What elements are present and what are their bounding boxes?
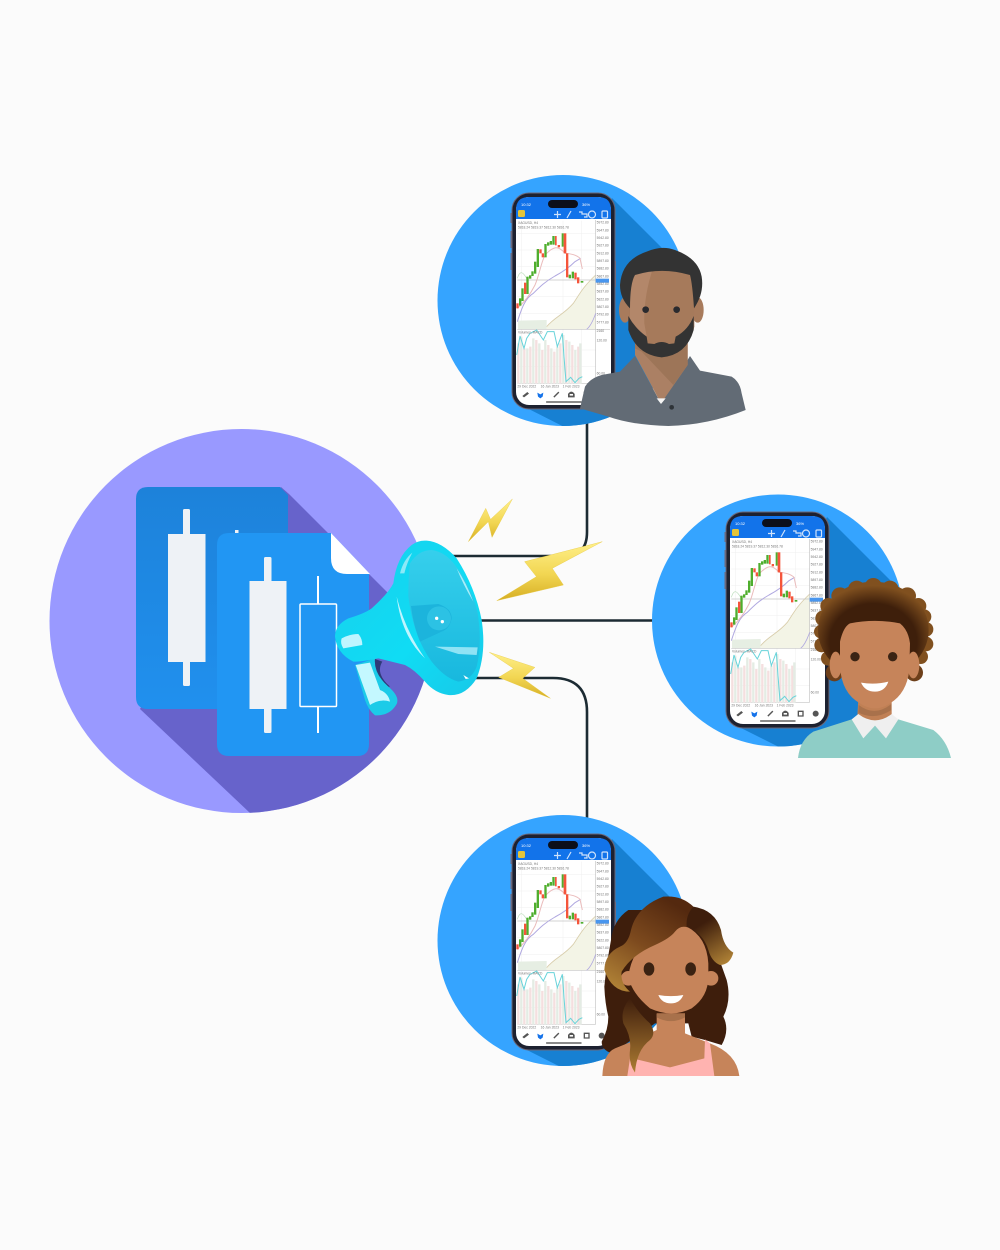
bell inner	[408, 550, 480, 682]
inner nub	[411, 604, 452, 642]
back document	[136, 487, 288, 709]
phone with chart	[724, 512, 830, 728]
phone with chart	[510, 193, 616, 409]
highlights	[435, 647, 478, 655]
body silhouette	[335, 541, 483, 695]
icon: megaphone	[335, 541, 483, 715]
panel: trader 2	[652, 494, 951, 758]
icon: lightning bolts	[468, 499, 602, 698]
panel: trader 3	[438, 815, 740, 1076]
panel: trader 1	[438, 175, 746, 426]
bulb highlight	[341, 634, 362, 648]
main purple circle	[50, 429, 434, 813]
handle	[355, 658, 397, 715]
phone shadow	[530, 198, 662, 426]
panel: candlestick documents	[50, 429, 424, 813]
blue circle	[438, 815, 688, 1066]
person: woman with wavy hair	[602, 896, 739, 1076]
front document	[217, 533, 370, 756]
connector lines	[450, 420, 655, 820]
blue circle	[652, 494, 904, 746]
crease behind handle	[373, 658, 390, 687]
handle highlight	[356, 663, 390, 705]
long shadow	[140, 487, 424, 813]
phone shadow	[729, 517, 890, 746]
phone with chart	[510, 834, 616, 1050]
person: curly hair	[798, 578, 951, 758]
blue circle	[438, 175, 688, 426]
nub tip	[427, 606, 451, 630]
phone shadow	[515, 839, 670, 1066]
person: man with beard	[580, 248, 746, 426]
